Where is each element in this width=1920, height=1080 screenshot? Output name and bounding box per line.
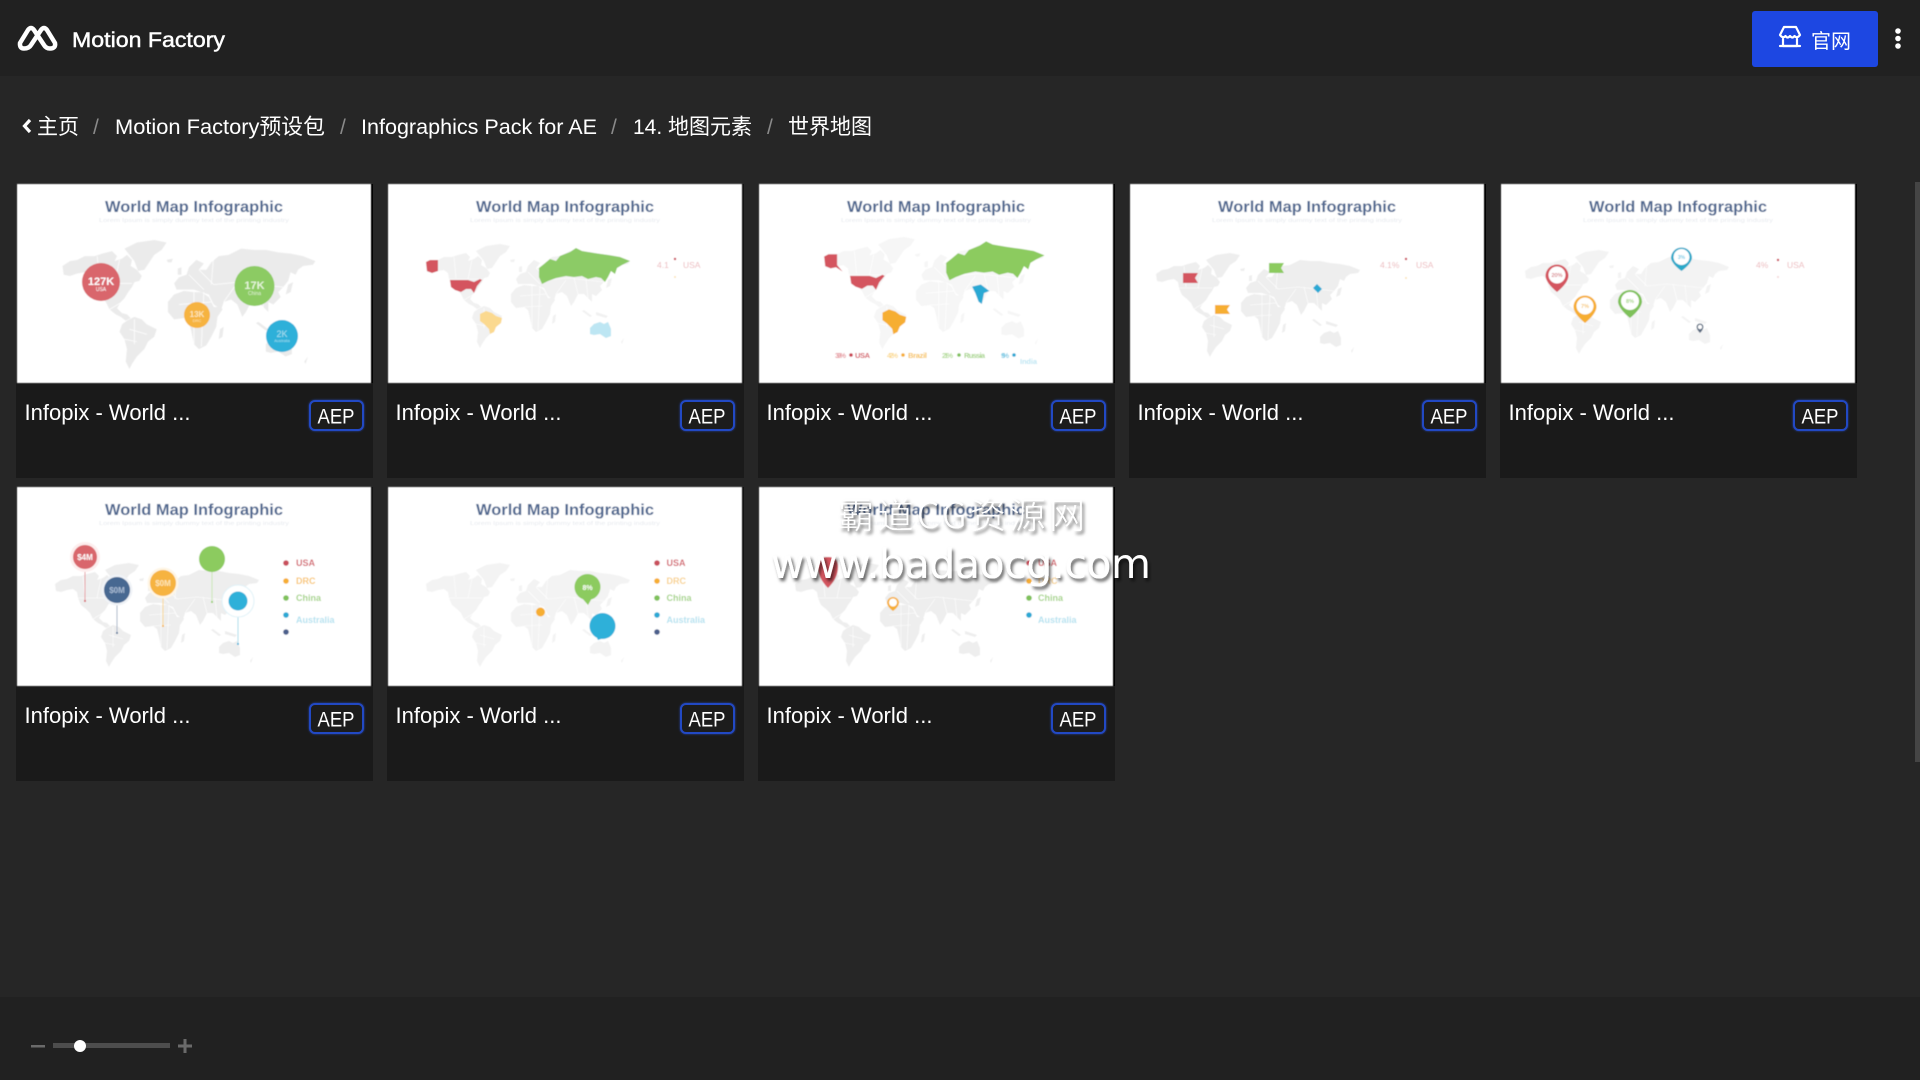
bubble green: 8% — [582, 585, 593, 592]
legend: USA — [666, 558, 686, 568]
world map with highlighted countries — [426, 244, 630, 348]
world map — [1525, 250, 1729, 354]
legend row: USA — [855, 351, 871, 360]
legend: China — [1038, 593, 1064, 603]
map pin navy small — [1696, 324, 1704, 333]
legend: Australia — [1038, 615, 1078, 625]
thumbnail image: Lorem Ipsum is simply dummy text of the printing industry — [99, 218, 289, 224]
marker green — [199, 546, 225, 603]
minus icon — [31, 1045, 45, 1048]
thumbnail image — [17, 487, 371, 686]
map pin green: 8% — [1626, 299, 1634, 305]
legend: 4% — [1756, 260, 1769, 270]
marker red — [70, 542, 100, 602]
AEP badge — [1423, 401, 1476, 430]
thumbnail title: World Map Infographic — [105, 199, 283, 216]
legend row: India — [1020, 357, 1038, 366]
legend: China — [666, 593, 692, 603]
AEP badge — [1052, 401, 1105, 430]
AEP badge — [1052, 704, 1105, 733]
panel: card 4 flags — [1129, 184, 1486, 478]
card name: Infopix - World ... — [766, 400, 932, 425]
legend row: 21% — [942, 351, 953, 360]
legend — [1380, 258, 1434, 279]
thumbnail image — [388, 184, 742, 383]
world map — [62, 240, 315, 369]
bubble DRC: DRC — [193, 318, 201, 323]
top navigation bar — [0, 0, 1920, 76]
world map — [55, 563, 259, 667]
card name: Infopix - World ... — [1508, 400, 1674, 425]
legend — [283, 558, 336, 635]
thumbnail title: World Map Infographic — [847, 199, 1025, 216]
legend: Australia — [666, 615, 706, 625]
map pin red — [818, 557, 838, 588]
breadcrumb: Infographics Pack for AE — [361, 115, 597, 139]
icon: storefront — [1780, 27, 1800, 46]
marker orange — [148, 568, 178, 627]
world map — [795, 563, 999, 667]
AEP badge: AEP — [1060, 404, 1096, 428]
breadcrumb: Motion Factory预设包 — [115, 115, 325, 139]
thumbnail image: Lorem Ipsum is simply dummy text of the printing industry — [470, 218, 660, 224]
AEP badge — [310, 401, 363, 430]
thumbnail title: World Map Infographic — [476, 199, 654, 216]
card name: Infopix - World ... — [24, 703, 190, 728]
panel: card 8 pins with watermark overlay — [758, 487, 1115, 781]
thumbnail image — [759, 487, 1113, 686]
bubble China: 17K — [244, 280, 265, 292]
map pin blue — [1671, 248, 1692, 271]
breadcrumb: / — [767, 116, 773, 139]
slider thumb — [74, 1040, 86, 1052]
map pin blue: 3% — [1678, 255, 1686, 261]
icon: back chevron — [24, 120, 30, 132]
AEP badge — [1794, 401, 1847, 430]
card name: Infopix - World ... — [766, 703, 932, 728]
bubble orange — [536, 608, 545, 616]
AEP badge: AEP — [318, 708, 354, 732]
thumbnail image: Lorem Ipsum is simply dummy text of the printing industry — [1583, 218, 1773, 224]
AEP badge: AEP — [1060, 708, 1096, 732]
bubble DRC: 13K — [190, 310, 205, 319]
card name: Infopix - World ... — [1138, 400, 1304, 425]
legend: DRC — [1038, 576, 1058, 586]
thumbnail image: Lorem Ipsum is simply dummy text of the printing industry — [99, 521, 289, 527]
legend: DRC — [296, 576, 316, 586]
breadcrumb: / — [93, 116, 99, 139]
AEP badge: AEP — [1802, 404, 1838, 428]
legend: DRC — [666, 576, 686, 586]
legend: 4.1 — [657, 260, 669, 270]
legend: USA — [1038, 558, 1058, 568]
breadcrumb — [24, 115, 872, 139]
panel: card 2 highlighted countries — [387, 184, 744, 478]
legend row: 9% — [1001, 351, 1009, 360]
bubble green — [574, 574, 600, 605]
marker navy — [102, 574, 132, 634]
AEP badge: AEP — [318, 404, 354, 428]
card name: Infopix - World ... — [396, 400, 562, 425]
bottom bar with zoom slider — [0, 997, 1920, 1080]
legend — [654, 558, 706, 635]
panel: card 7 speech bubbles — [387, 487, 744, 781]
legend: China — [296, 593, 322, 603]
bubble China: China — [248, 291, 261, 297]
legend: USA — [683, 260, 701, 270]
watermark: 霸道CG资源网 — [838, 487, 1085, 539]
world map with highlighted countries — [824, 237, 1044, 349]
AEP badge: AEP — [1430, 404, 1468, 428]
world map — [1156, 253, 1360, 357]
legend — [1756, 259, 1805, 278]
flag markers — [1183, 263, 1322, 314]
legend: Australia — [296, 615, 336, 625]
AEP badge: AEP — [688, 404, 726, 428]
scrollbar — [1915, 182, 1920, 762]
breadcrumb: 主页 — [37, 115, 79, 139]
brand name: Motion Factory — [72, 28, 225, 52]
thumbnail image: Lorem Ipsum is simply dummy text of the printing industry — [841, 218, 1031, 224]
legend row — [835, 351, 1038, 366]
thumbnail title: World Map Infographic — [1218, 199, 1396, 216]
thumbnail image: Lorem Ipsum is simply dummy text of the printing industry — [1212, 218, 1402, 224]
AEP badge — [310, 704, 363, 733]
legend row: 39% — [835, 351, 846, 360]
watermark: www.badaocg.com — [771, 540, 1151, 588]
panel: card 3 highlighted countries with bottom legend — [758, 184, 1115, 478]
bubble blue — [590, 613, 616, 640]
watermark — [771, 487, 1151, 588]
bubble USA — [82, 263, 120, 301]
bubble USA: 127K — [88, 276, 114, 288]
world map — [426, 563, 630, 667]
bubble USA: USA — [96, 287, 107, 293]
map pin orange — [1574, 296, 1596, 323]
bubble DRC — [184, 302, 210, 328]
legend: USA — [1787, 260, 1805, 270]
legend — [1026, 558, 1078, 625]
map pin red: 20% — [1551, 273, 1563, 279]
bubble China — [234, 266, 274, 306]
thumbnail image — [17, 184, 371, 383]
thumbnail image: Lorem Ipsum is simply dummy text of the printing industry — [470, 521, 660, 527]
legend row: Russia — [964, 351, 986, 360]
legend — [657, 258, 701, 278]
panel: card 1 bubbles — [16, 184, 373, 478]
map pin orange — [887, 597, 899, 611]
official site button — [1752, 11, 1878, 67]
breadcrumb: / — [611, 116, 617, 139]
AEP badge — [681, 704, 734, 733]
map pin orange: 7% — [1581, 304, 1589, 310]
breadcrumb: 世界地图 — [788, 115, 872, 139]
bubble Australia: 2K — [276, 329, 288, 339]
plus icon — [178, 1039, 192, 1053]
thumbnail title: World Map Infographic — [105, 502, 283, 519]
legend: 4.1% — [1380, 260, 1400, 270]
marker red: $4M — [77, 553, 93, 562]
map pin red — [1546, 264, 1568, 292]
map pin green — [1618, 290, 1642, 318]
icon: more menu dots — [1895, 28, 1901, 49]
legend row: Brazil — [908, 351, 927, 360]
slider track — [53, 1043, 170, 1048]
button label: 官网 — [1811, 30, 1851, 53]
thumbnail image — [759, 184, 1113, 383]
panel: card 5 pins — [1500, 184, 1857, 478]
legend: USA — [296, 558, 316, 568]
legend: USA — [1416, 260, 1434, 270]
thumbnail image — [1130, 184, 1484, 383]
thumbnail image: Lorem Ipsum is simply dummy text of the printing industry — [841, 521, 1031, 527]
card name: Infopix - World ... — [24, 400, 190, 425]
bubble Australia — [266, 320, 298, 352]
thumbnail title: World Map Infographic — [847, 502, 1025, 519]
AEP badge — [681, 401, 734, 430]
icon: Motion Factory logo — [20, 28, 55, 48]
marker blue — [222, 585, 254, 645]
breadcrumb: / — [340, 116, 346, 139]
marker navy: $0M — [109, 586, 125, 595]
thumbnail image — [388, 487, 742, 686]
bubble Australia: Australia — [274, 338, 291, 343]
marker orange: $0M — [155, 579, 171, 588]
card name: Infopix - World ... — [396, 703, 562, 728]
thumbnail title: World Map Infographic — [476, 502, 654, 519]
panel: card 6 balloon markers — [16, 487, 373, 781]
thumbnail title: World Map Infographic — [1589, 199, 1767, 216]
AEP badge: AEP — [688, 708, 726, 732]
legend row: 42% — [887, 351, 898, 360]
thumbnail image — [1501, 184, 1855, 383]
breadcrumb: 14. 地图元素 — [633, 115, 752, 139]
